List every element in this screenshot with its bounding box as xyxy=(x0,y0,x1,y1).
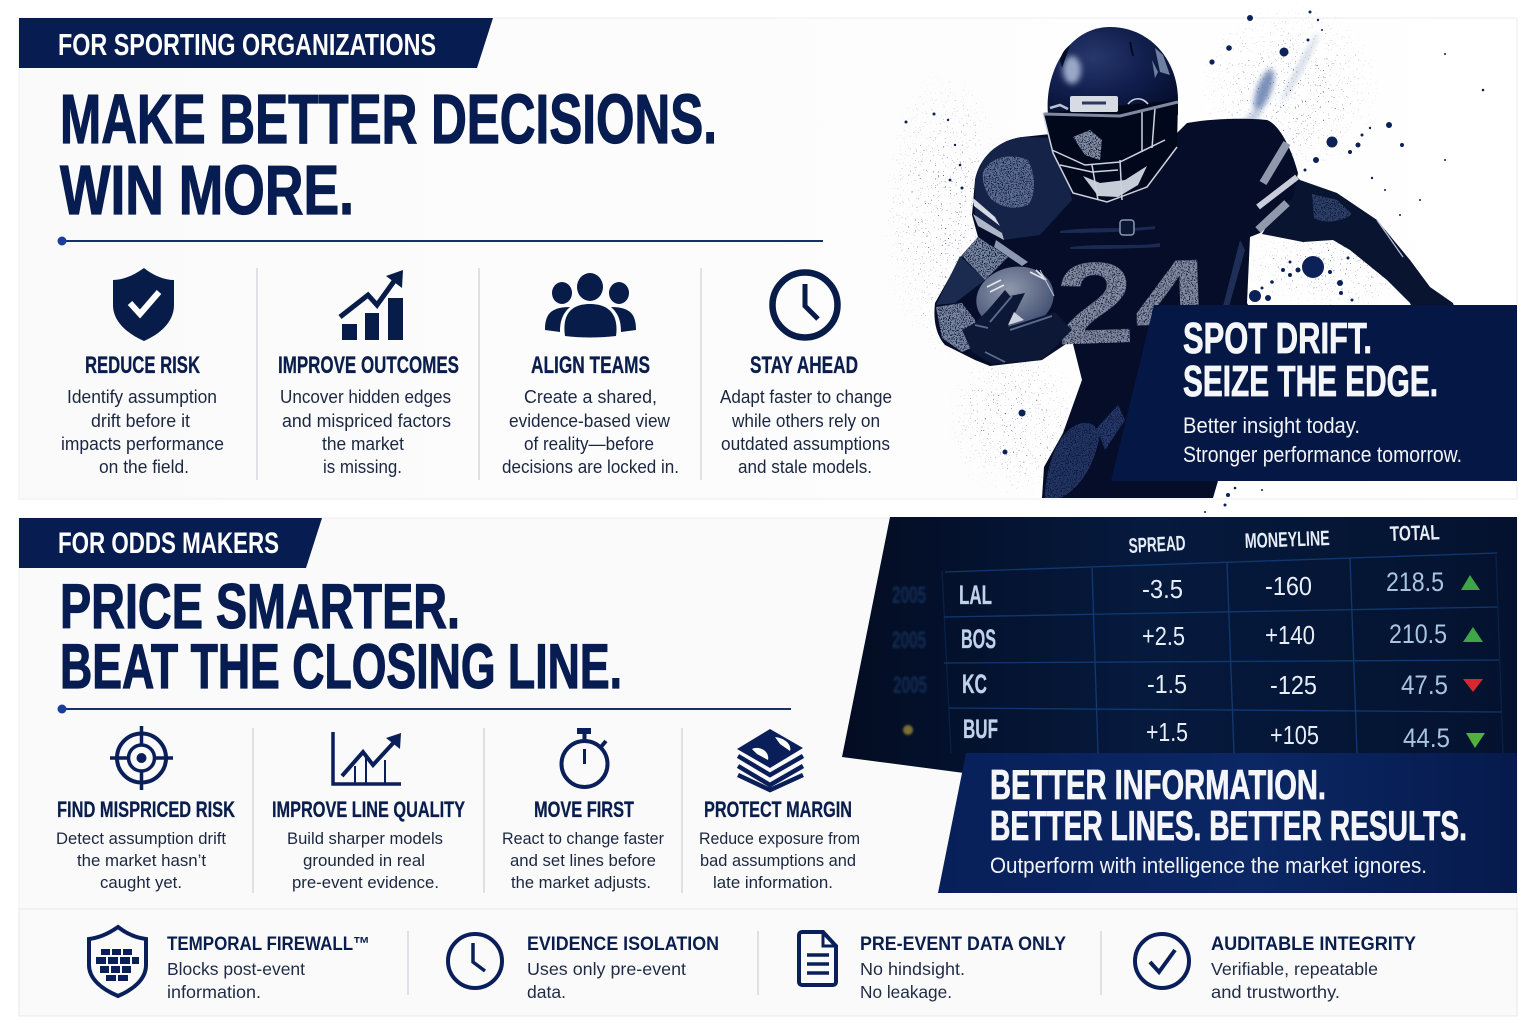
jersey number 24: 24 xyxy=(1054,234,1214,370)
benefit: stay ahead: while others rely on xyxy=(731,411,880,431)
player glove xyxy=(962,290,1072,364)
benefit: improve line quality xyxy=(272,732,465,892)
benefit: improve outcomes: Uncover hidden edges xyxy=(280,387,451,407)
icon: check circle xyxy=(1135,934,1189,988)
odds column headers: SPREAD xyxy=(1128,532,1186,558)
rule with dot xyxy=(58,704,791,714)
benefit: align teams: ALIGN TEAMS xyxy=(531,352,650,379)
callout: better information: Outperform with intelligence the market ignores. xyxy=(990,853,1427,878)
odds row KC xyxy=(962,669,1483,700)
benefit: improve outcomes xyxy=(278,270,459,477)
odds row BOS: +2.5 xyxy=(1142,621,1185,651)
benefit: find mispriced risk: caught yet. xyxy=(100,873,182,892)
odds row BOS: 210.5 xyxy=(1389,619,1447,649)
blurred left column: 2005 xyxy=(892,582,926,609)
banner: for sporting organizations: FOR SPORTING ORGANIZATIONS xyxy=(58,27,436,62)
benefit: reduce risk: on the field. xyxy=(99,457,189,477)
icon: clock xyxy=(448,934,502,988)
benefit: align teams xyxy=(502,273,679,477)
illustration: football player xyxy=(934,27,1456,498)
benefit: move first: React to change faster xyxy=(502,829,664,848)
icon: document xyxy=(799,932,836,985)
benefit: find mispriced risk: the market hasn’t xyxy=(77,851,206,870)
ink splatter xyxy=(882,4,1484,513)
panel: for odds makers xyxy=(19,517,1517,909)
odds row BOS: +140 xyxy=(1265,620,1315,650)
benefit: stay ahead: outdated assumptions xyxy=(721,434,890,454)
assurance: pre-event data only: No leakage. xyxy=(860,982,952,1002)
icon: line chart xyxy=(333,732,401,784)
odds row KC: KC xyxy=(962,669,987,699)
odds row BUF: +1.5 xyxy=(1146,717,1188,747)
football xyxy=(970,260,1060,336)
headline: price smarter xyxy=(60,572,622,702)
assurance: evidence isolation xyxy=(448,934,719,1002)
benefit: align teams: evidence-based view xyxy=(509,411,671,431)
benefit: protect margin: Reduce exposure from xyxy=(699,829,860,848)
assurance: temporal firewall: TEMPORAL FIREWALL™ xyxy=(167,934,370,955)
headline: price smarter: PRICE SMARTER. xyxy=(60,572,460,642)
benefit: improve line quality: grounded in real xyxy=(303,851,425,870)
assurance: pre-event data only xyxy=(799,932,1066,1002)
icon: team of people xyxy=(545,273,636,338)
odds column headers: MONEYLINE xyxy=(1244,527,1330,553)
icon: clock xyxy=(772,272,838,338)
benefit: find mispriced risk: Detect assumption drift xyxy=(56,829,226,848)
headline: price smarter: BEAT THE CLOSING LINE. xyxy=(60,632,622,702)
benefit: move first: MOVE FIRST xyxy=(534,797,634,822)
blurred left column: 2005 xyxy=(893,672,927,699)
odds row KC: -1.5 xyxy=(1147,669,1187,699)
benefit: protect margin: late information. xyxy=(713,873,833,892)
assurance: evidence isolation: Uses only pre-event xyxy=(527,959,686,979)
blurred left column: 2005 xyxy=(892,627,926,654)
benefit: stay ahead: STAY AHEAD xyxy=(750,352,858,379)
callout: spot drift: Better insight today. xyxy=(1183,413,1360,438)
benefit: improve outcomes: IMPROVE OUTCOMES xyxy=(278,352,459,379)
assurance: auditable integrity: AUDITABLE INTEGRITY xyxy=(1211,934,1416,955)
benefit: protect margin: bad assumptions and xyxy=(700,851,856,870)
odds row BOS: BOS xyxy=(961,624,996,654)
odds grid lines xyxy=(942,553,1503,753)
assurance: temporal firewall: Blocks post-event xyxy=(167,959,305,979)
benefit: stay ahead: and stale models. xyxy=(738,457,872,477)
callout: spot drift xyxy=(1111,305,1517,481)
callout: spot drift: SPOT DRIFT. xyxy=(1183,314,1372,363)
benefit: reduce risk xyxy=(61,268,224,477)
benefit: protect margin xyxy=(699,729,860,892)
icon: target xyxy=(110,726,173,790)
odds board xyxy=(842,517,1517,790)
odds row KC: 47.5 xyxy=(1401,670,1448,700)
icon: money stack xyxy=(737,729,803,790)
benefit: reduce risk: impacts performance xyxy=(61,434,224,454)
benefit: reduce risk: REDUCE RISK xyxy=(85,352,200,379)
player right arm xyxy=(1262,176,1456,312)
benefit: improve outcomes: and mispriced factors xyxy=(282,411,451,431)
benefit: move first: the market adjusts. xyxy=(511,873,651,892)
odds row BUF: 44.5 xyxy=(1403,723,1450,753)
odds row LAL xyxy=(959,567,1480,610)
benefit: move first: and set lines before xyxy=(510,851,656,870)
benefit: stay ahead: Adapt faster to change xyxy=(720,387,892,407)
assurance: auditable integrity xyxy=(1135,934,1416,1002)
odds row BUF: +105 xyxy=(1270,720,1319,750)
callout: better information: BETTER INFORMATION. xyxy=(990,761,1326,808)
odds row LAL: -160 xyxy=(1265,571,1312,601)
benefit: find mispriced risk xyxy=(56,726,235,892)
banner: for sporting organizations xyxy=(19,18,493,68)
headline: make better decisions xyxy=(60,80,717,229)
benefit: improve outcomes: is missing. xyxy=(323,457,402,477)
rule with dot xyxy=(58,236,823,246)
panel: for sporting organizations xyxy=(19,0,1536,520)
benefit: stay ahead xyxy=(720,272,892,477)
icon: rising bar chart xyxy=(340,270,403,340)
benefit: align teams: of reality—before xyxy=(524,434,654,454)
benefit: reduce risk: drift before it xyxy=(91,411,190,431)
helmet xyxy=(1043,27,1178,202)
icon: shield check xyxy=(113,268,174,341)
odds column headers: TOTAL xyxy=(1389,521,1440,546)
benefit: move first xyxy=(502,728,664,892)
assurance: auditable integrity: and trustworthy. xyxy=(1211,982,1340,1002)
benefit: align teams: Create a shared, xyxy=(524,387,657,407)
banner: for odds makers: FOR ODDS MAKERS xyxy=(58,527,279,560)
benefit: improve line quality: IMPROVE LINE QUALITY xyxy=(272,797,465,822)
assurance: pre-event data only: PRE-EVENT DATA ONLY xyxy=(860,934,1066,955)
assurance: auditable integrity: Verifiable, repeatable xyxy=(1211,959,1378,979)
odds row LAL: 218.5 xyxy=(1386,567,1444,597)
assurance: temporal firewall: information. xyxy=(167,982,261,1002)
headline: make better decisions: WIN MORE. xyxy=(60,151,354,229)
benefit: improve outcomes: the market xyxy=(322,434,404,454)
blurred left column xyxy=(892,582,927,735)
odds row BOS xyxy=(961,619,1483,654)
odds row BUF xyxy=(963,714,1485,753)
facemask xyxy=(1043,96,1178,202)
banner: for odds makers xyxy=(19,518,322,568)
odds row BUF: BUF xyxy=(963,714,998,744)
callout: better information xyxy=(938,753,1517,893)
benefit: improve line quality: Build sharper models xyxy=(287,829,443,848)
benefit: align teams: decisions are locked in. xyxy=(502,457,679,477)
assurance: evidence isolation: EVIDENCE ISOLATION xyxy=(527,934,719,955)
headline: make better decisions: MAKE BETTER DECISIONS. xyxy=(60,80,717,158)
icon: firewall shield xyxy=(89,927,146,996)
panel: assurance footer xyxy=(19,909,1517,1016)
odds row LAL: LAL xyxy=(959,580,992,610)
callout: spot drift: Stronger performance tomorrow. xyxy=(1183,442,1462,467)
assurance: temporal firewall xyxy=(89,927,370,1002)
odds row LAL: -3.5 xyxy=(1142,574,1183,604)
odds row KC: -125 xyxy=(1270,670,1317,700)
benefit: reduce risk: Identify assumption xyxy=(67,387,217,407)
benefit: find mispriced risk: FIND MISPRICED RISK xyxy=(57,797,235,822)
assurance: evidence isolation: data. xyxy=(527,982,566,1002)
player torso and left arm xyxy=(934,119,1298,498)
odds column headers xyxy=(1128,521,1440,558)
benefit: protect margin: PROTECT MARGIN xyxy=(704,797,852,822)
assurance: pre-event data only: No hindsight. xyxy=(860,959,965,979)
icon: stopwatch xyxy=(562,728,608,787)
player highlights xyxy=(936,137,1297,498)
benefit: improve line quality: pre-event evidence. xyxy=(292,873,439,892)
